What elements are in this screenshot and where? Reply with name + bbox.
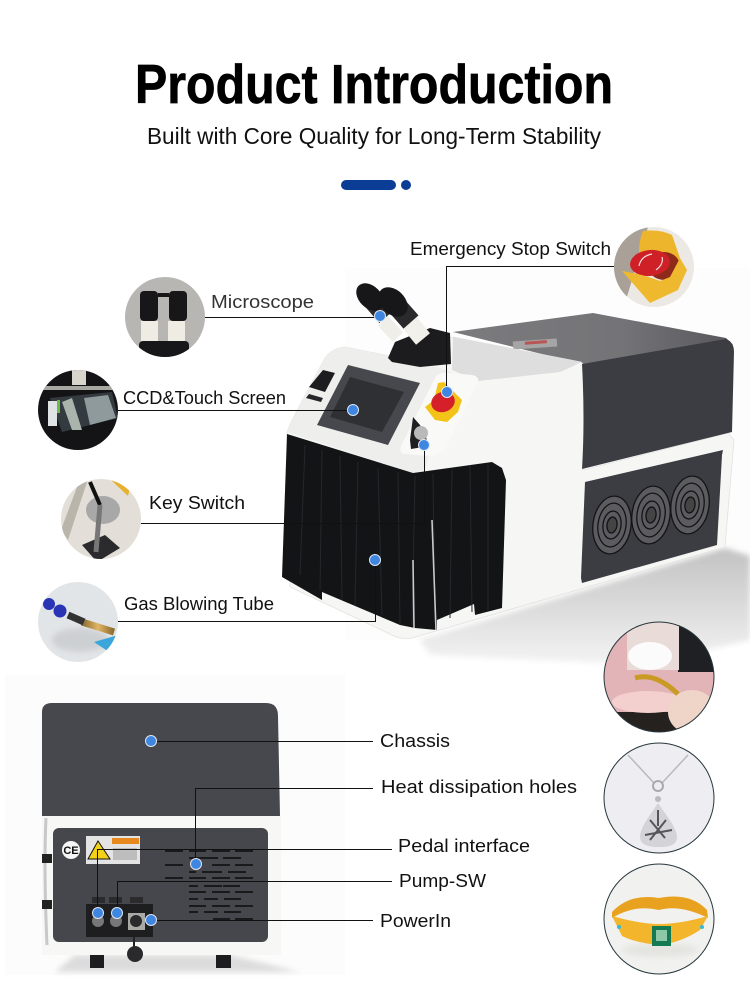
callout: gas blowing tube xyxy=(38,554,380,662)
control panel recess xyxy=(400,373,478,456)
label: microscope: Microscope xyxy=(211,292,314,312)
label: key switch: Key Switch xyxy=(149,493,245,513)
dark side panel xyxy=(582,339,734,469)
subtitle: Built with Core Quality for Long-Term Stability xyxy=(147,123,601,149)
label: power in: PowerIn xyxy=(380,911,451,931)
callout: key switch xyxy=(61,440,430,562)
fan 1 xyxy=(589,494,635,556)
callout: chassis xyxy=(146,731,450,751)
connector label plates xyxy=(92,897,143,903)
top cover xyxy=(453,313,733,364)
fan panel xyxy=(581,450,723,583)
sample photo: necklace xyxy=(604,743,714,853)
vent holes xyxy=(165,851,253,919)
key switch xyxy=(410,417,429,449)
white body xyxy=(42,816,281,955)
rear view of machine xyxy=(42,703,300,972)
label: gas blowing tube: Gas Blowing Tube xyxy=(124,594,274,614)
fan 2 xyxy=(628,484,674,546)
touch screen xyxy=(317,365,420,445)
backdrop of rear photo xyxy=(5,675,345,975)
callout: touch screen xyxy=(38,370,358,450)
callout: emergency stop switch xyxy=(410,227,694,398)
label: pedal interface: Pedal interface xyxy=(398,836,530,856)
sample photo: ring xyxy=(604,622,716,734)
warning label xyxy=(86,836,140,864)
main machine xyxy=(282,278,734,638)
callout: pump switch xyxy=(112,871,486,918)
callout: power in xyxy=(146,911,451,931)
thumbnail: key switch xyxy=(61,479,141,562)
feet xyxy=(90,955,104,968)
label: emergency stop: Emergency Stop Switch xyxy=(410,239,611,259)
fan 3 xyxy=(667,474,713,536)
title: Product Introduction xyxy=(135,53,613,115)
label: touch screen: CCD&Touch Screen xyxy=(123,388,286,408)
emergency stop switch xyxy=(425,382,462,422)
fringe curtain xyxy=(282,434,506,630)
thumbnail: touch screen xyxy=(38,370,118,450)
accent bar and dot xyxy=(341,180,411,190)
sample photo: bangle xyxy=(604,864,714,974)
backdrop of main machine photo xyxy=(345,268,750,640)
CE mark: CE xyxy=(63,845,79,857)
control buttons xyxy=(309,370,335,392)
cable grommet xyxy=(133,937,135,948)
thumbnail: emergency stop xyxy=(614,227,694,307)
label: chassis: Chassis xyxy=(380,731,450,751)
chassis panel xyxy=(42,703,280,816)
callout: heat dissipation holes xyxy=(190,777,577,870)
thumbnail: gas blowing tube xyxy=(38,582,118,662)
thumbnail: microscope xyxy=(125,277,205,359)
rear panel xyxy=(53,828,268,942)
callout: pedal interface xyxy=(92,836,530,918)
machine white body xyxy=(287,337,734,638)
microscope xyxy=(351,278,451,367)
callout: microscope xyxy=(125,277,386,359)
CE mark xyxy=(62,841,80,859)
label: heat dissipation holes: Heat dissipation holes xyxy=(381,777,577,797)
label: pump switch: Pump-SW xyxy=(399,871,486,891)
rear shadow xyxy=(55,955,300,972)
floor shadow xyxy=(420,548,750,665)
connector plate xyxy=(86,904,153,937)
